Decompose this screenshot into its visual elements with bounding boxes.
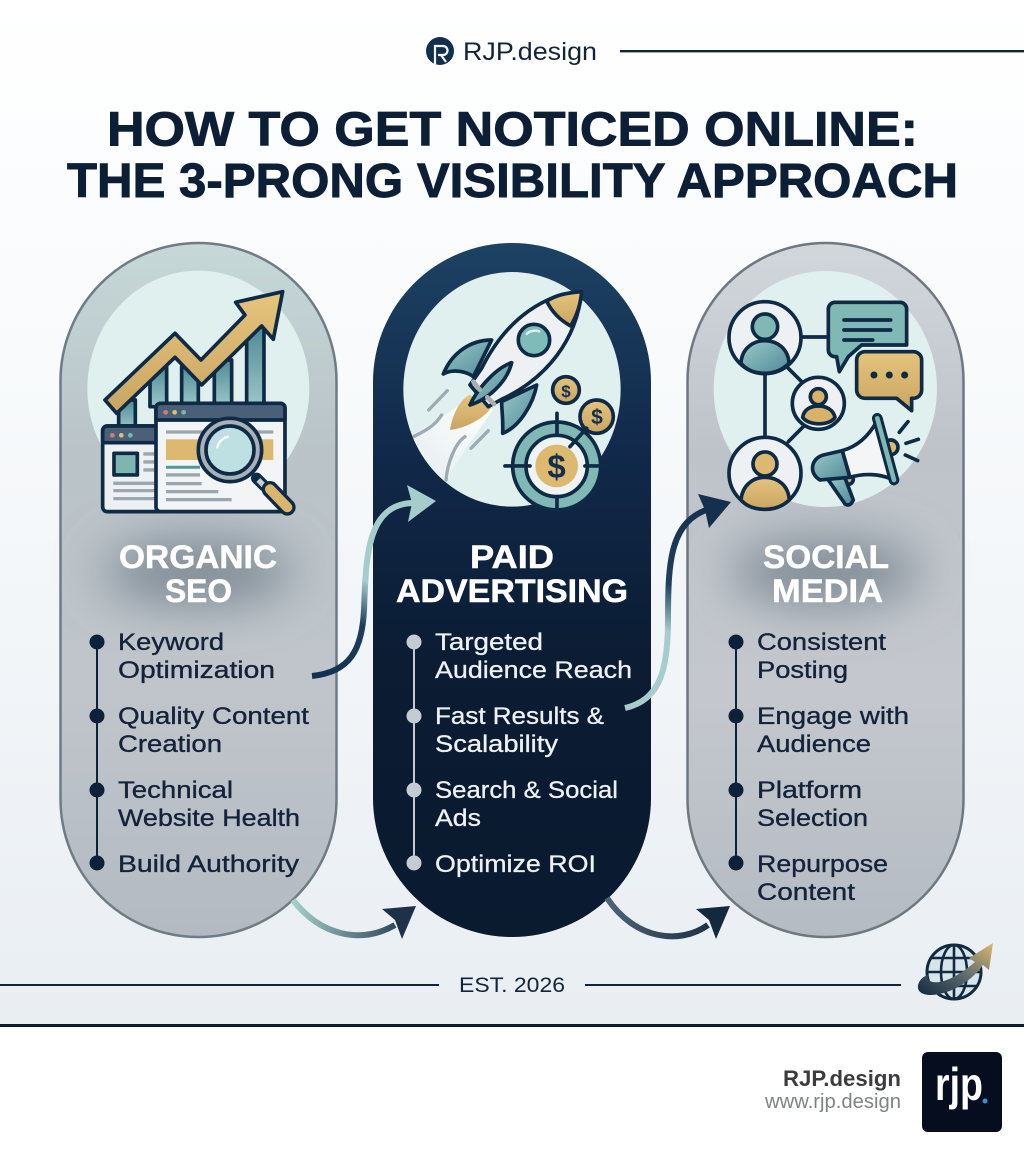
list: social media: Consistent bbox=[757, 629, 886, 656]
title: THE 3-PRONG VISIBILITY APPROACH bbox=[67, 155, 958, 208]
footer logo bbox=[922, 1052, 1002, 1132]
title bbox=[67, 104, 958, 208]
arrow: organic to paid, lower bbox=[293, 900, 416, 939]
heading: paid advertising: ADVERTISING bbox=[396, 573, 628, 609]
list: organic SEO: Quality Content bbox=[118, 703, 309, 730]
heading: organic SEO: ORGANIC bbox=[119, 539, 277, 575]
list: paid advertising: Targeted bbox=[435, 629, 543, 656]
list: social media: Content bbox=[757, 879, 855, 906]
list: organic SEO: Keyword bbox=[118, 629, 224, 656]
icon: growth chart and search bbox=[87, 271, 309, 512]
list: organic SEO: Technical bbox=[118, 777, 233, 804]
heading: organic SEO bbox=[119, 539, 277, 609]
header brand bbox=[426, 37, 1024, 66]
list: paid advertising: Search & Social bbox=[435, 777, 618, 804]
footer credits: www.rjp.design bbox=[764, 1091, 901, 1113]
list: paid advertising: Ads bbox=[435, 805, 481, 832]
list: social media: Selection bbox=[757, 805, 868, 832]
heading: organic SEO: SEO bbox=[165, 573, 232, 609]
heading: social media: SOCIAL bbox=[763, 539, 889, 575]
heading: paid advertising: PAID bbox=[470, 539, 554, 575]
arrow: organic to paid bbox=[312, 485, 436, 676]
icon labels: dollar signs bbox=[547, 382, 603, 485]
list: organic SEO: Website Health bbox=[118, 805, 300, 832]
timeline: social media bbox=[728, 634, 744, 870]
list: paid advertising: Optimize ROI bbox=[435, 851, 596, 878]
title: HOW TO GET NOTICED ONLINE: bbox=[107, 104, 918, 156]
heading: social media: MEDIA bbox=[772, 573, 883, 609]
icon labels: dollar signs: $ bbox=[561, 382, 571, 401]
list: paid advertising bbox=[435, 629, 632, 878]
list: organic SEO: Optimization bbox=[118, 657, 275, 684]
list: paid advertising: Audience Reach bbox=[435, 657, 632, 684]
established line: EST. 2026 bbox=[459, 974, 565, 997]
icon: social network and megaphone bbox=[714, 271, 937, 509]
list: social media: Engage with bbox=[757, 703, 909, 730]
list: paid advertising: Fast Results & bbox=[435, 703, 604, 730]
heading: social media bbox=[763, 539, 889, 609]
icon labels: dollar signs: $ bbox=[547, 448, 566, 485]
list: social media: Posting bbox=[757, 657, 848, 684]
list: organic SEO bbox=[118, 629, 309, 878]
footer credits: RJP.design bbox=[783, 1066, 901, 1091]
footer divider bbox=[0, 1024, 1024, 1027]
heading: paid advertising bbox=[396, 539, 628, 609]
icon labels: dollar signs: $ bbox=[591, 406, 603, 429]
list: organic SEO: Build Authority bbox=[118, 851, 299, 878]
footer credits bbox=[764, 1066, 901, 1113]
panel: organic SEO bbox=[60, 243, 336, 937]
footer logo: rjp bbox=[935, 1058, 983, 1110]
list: social media: Repurpose bbox=[757, 851, 888, 878]
timeline: paid advertising bbox=[406, 634, 422, 870]
icon: globe with arrow bbox=[918, 943, 993, 999]
list: paid advertising: Scalability bbox=[435, 731, 558, 758]
list: social media bbox=[757, 629, 909, 906]
list: social media: Audience bbox=[757, 731, 871, 758]
arrow: paid to social bbox=[625, 494, 731, 708]
arrow: paid to social, lower bbox=[607, 898, 730, 939]
brand name: RJP.design bbox=[463, 38, 597, 66]
timeline: organic SEO bbox=[90, 634, 104, 870]
header rule bbox=[620, 50, 1024, 52]
panel: social media bbox=[625, 243, 964, 937]
panel: paid advertising bbox=[312, 243, 651, 937]
icon: rocket and target bbox=[403, 272, 621, 511]
brand logo mark bbox=[426, 37, 454, 65]
list: social media: Platform bbox=[757, 777, 862, 804]
list: organic SEO: Creation bbox=[118, 731, 222, 758]
